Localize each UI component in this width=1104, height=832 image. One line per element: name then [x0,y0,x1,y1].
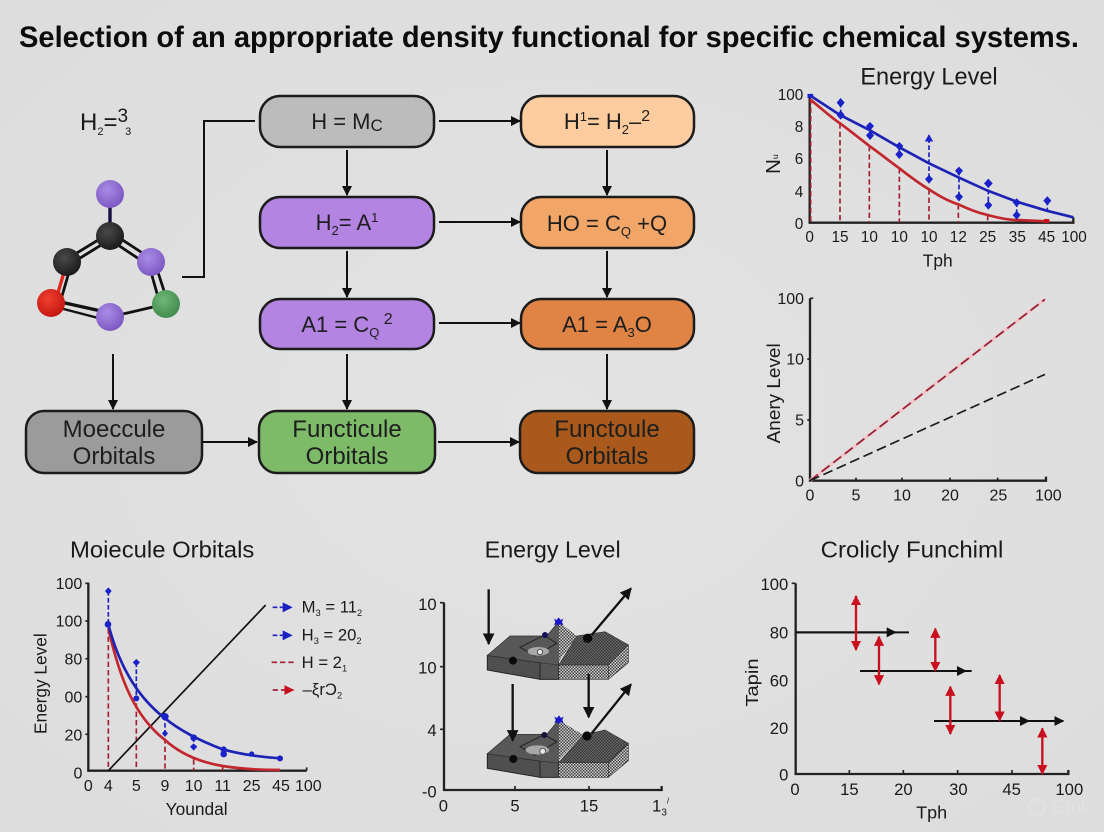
x tick labels: 10 [920,229,938,246]
x tick labels: 10 [861,229,878,246]
y tick labels: 10 [418,658,437,677]
red dashed line [810,299,1045,481]
y tick labels: 20 [770,719,788,738]
box: A1 = A3O: A1 = A [562,312,628,337]
blue markers [105,587,283,761]
y tick labels: 10 [786,352,804,369]
axes [444,603,662,790]
box: A1 = A3O: 3 [628,325,635,340]
chart: molecule orbitals [31,537,362,819]
connector: molecule to flowchart [182,121,255,277]
box: Functicule Orbitals: Orbitals [306,443,388,470]
box: Moeccule Orbitals: Moeccule [63,416,165,443]
y axis label: N [762,159,785,174]
legend: –ξrϽ [303,680,337,699]
red curve [108,628,280,770]
y tick labels: 0 [795,216,803,233]
x tick labels: 3 [661,808,667,819]
chart title: Crolicly Funchiml [821,537,1003,563]
box: A1 = A3O [521,299,694,349]
y tick labels [418,595,437,801]
chart: middle right anery level [763,291,1062,505]
legend: 2 [356,636,362,646]
x tick labels: 45 [272,778,290,795]
red curve [810,99,1047,221]
black diagonal line [108,605,266,771]
x tick labels: 5 [132,778,141,795]
legend: 2 [337,690,342,700]
x tick labels: 5 [510,797,520,816]
box: H1 = H2-2: 2 [622,122,629,137]
x tick labels: 15 [840,780,859,799]
blue curve [108,624,280,758]
x tick labels: 15 [831,229,849,246]
x tick labels [790,780,1083,799]
legend: H = 2 [302,653,342,672]
formula label: = [103,109,117,136]
y tick labels: 100 [778,87,803,104]
chart: top right energy level [762,65,1087,271]
x tick labels: 0 [806,488,815,505]
x tick labels: 20 [894,780,913,799]
arrow: molecule to molecule orbitals [112,354,114,409]
block: lower [487,715,628,777]
box: A1 = Cq2: Q [369,325,379,340]
y tick labels: 0 [795,474,804,491]
red marker [1044,219,1049,223]
x tick labels [84,778,322,795]
box: A1 = A3O: O [635,312,652,337]
box: A1 = Cq2: A1 = C [301,312,369,337]
formula label: 3 [125,126,131,138]
axis ticks [85,583,307,771]
box: H = Mc [260,96,434,147]
box: Functoule Orbitals [520,411,694,473]
x tick labels: 10 [893,488,911,505]
box: H2 = A1: 1 [371,210,378,225]
arrows [489,588,631,741]
icon: molecule [37,180,180,331]
y tick labels [778,87,804,233]
box: H2 = A1 [260,197,434,248]
flow arrows [202,121,607,442]
y tick labels: 0 [73,766,82,783]
box: Functoule Orbitals: Functoule [554,416,660,443]
x axis label: Tph [923,251,953,271]
y tick labels [761,575,788,785]
y tick labels: 10 [418,595,437,614]
y axis label: Energy Level [31,633,51,734]
y axis label: Anery Level [763,343,784,443]
x tick labels: 10 [891,229,908,246]
legend: = 20 [319,626,356,645]
legend: 3 [316,608,321,618]
watermark: Grok [1051,797,1091,817]
x tick labels: 100 [1035,488,1062,505]
axes [810,298,1046,481]
axes [810,95,1073,223]
blue error bars [841,103,1047,215]
chart title: Energy Level [485,537,621,563]
axes [796,583,1068,774]
box: H = Mc: C [371,116,383,135]
formula label: 2 [97,126,103,138]
x tick labels: 0 [84,778,93,795]
box: H1 = H2-2: = H [587,109,622,134]
x tick labels: 25 [979,229,996,246]
box: Functicule Orbitals: Functicule [292,416,402,443]
box: Moeccule Orbitals [26,411,202,473]
x axis label: Tph [916,802,947,822]
black dashed line [810,374,1045,481]
x tick labels: 30 [949,780,968,799]
legend: = 11 [321,598,357,617]
legend: M [302,598,316,617]
blue curve [809,95,1073,217]
y tick labels: 4 [795,184,804,201]
x tick labels: 100 [1055,780,1083,799]
legend: 3 [314,636,319,646]
y tick labels: 80 [770,624,788,643]
black horizontal arrows [796,632,1063,721]
box: H1 = H2-2 [521,96,694,147]
legend: H [302,626,314,645]
x tick labels: 45 [1038,229,1055,246]
y tick labels: 5 [795,413,804,430]
y axis label: u [770,154,780,159]
y tick labels: 0 [779,766,788,785]
x tick labels [806,488,1062,505]
y tick labels: 6 [795,151,803,168]
legend: 2 [357,608,362,618]
title: Selection of an appropriate density functional for specific chemical systems. [19,21,1079,54]
x tick labels: 12 [950,229,967,246]
y tick labels [777,291,804,491]
x tick labels: 5 [852,488,861,505]
y tick labels: 8 [795,119,803,136]
y tick labels: 100 [777,291,804,308]
box: HO = Cq + Q: +Q [631,211,667,236]
y tick labels: 80 [65,651,82,668]
x tick labels: 20 [941,488,959,505]
red dashed drop lines [108,628,280,771]
y tick labels: 20 [65,727,82,744]
x tick labels: 15 [580,797,598,816]
x tick labels [805,229,1087,246]
box: H2 = A1: 2 [332,223,339,238]
watermark [1029,797,1091,817]
x tick labels: 35 [1009,229,1026,246]
box: HO = Cq + Q: HO = C [547,211,621,236]
y tick labels: 100 [56,576,82,593]
x tick labels: 100 [1061,229,1087,246]
x axis label: Youndal [166,799,228,819]
blue markers [808,94,1051,219]
box: H1 = H2-2: 1 [580,109,587,124]
box: H1 = H2-2: H [564,109,580,134]
x tick labels: 1 [652,797,661,816]
x tick labels: / [667,796,670,806]
x tick labels: 4 [104,778,113,795]
y tick labels: 100 [761,575,788,594]
y tick labels: 100 [56,614,82,631]
blue error bars [108,591,224,754]
box: A1 = Cq2: 2 [379,311,393,328]
block: upper [487,617,628,679]
red dashed drop lines [811,99,988,223]
chart title: Moiecule Orbitals [70,537,254,563]
box: H = Mc: H = M [311,109,371,134]
y tick labels: 60 [770,672,788,691]
x tick labels: 0 [790,780,800,799]
tick marks [807,298,998,481]
x tick labels: 10 [185,778,203,795]
x tick labels [439,796,670,819]
box: H2 = A1: H [316,210,332,235]
box: Functicule Orbitals [259,411,435,473]
x tick labels: 0 [439,797,448,816]
y tick labels [56,576,82,783]
axes [88,583,307,771]
box: H1 = H2-2: – [629,109,642,134]
x tick labels: 0 [805,229,814,246]
legend: 1 [342,663,347,673]
x tick labels: 9 [161,778,170,795]
formula label: H [80,109,97,136]
y tick labels: 00 [65,690,82,707]
box: H1 = H2-2: 2 [641,108,650,125]
box: Moeccule Orbitals: Orbitals [73,443,155,470]
red double arrows [856,596,1042,774]
x tick labels: 100 [295,778,322,795]
legend [272,598,362,700]
y tick labels: 4 [427,721,437,740]
x tick labels: 11 [214,778,231,795]
x tick labels: 45 [1002,780,1021,799]
x tick labels: 25 [989,488,1007,505]
y tick labels: -0 [422,782,437,801]
chart: energy level blocks [418,537,670,819]
box: Functoule Orbitals: Orbitals [566,443,648,470]
box: HO = Cq + Q: Q [621,224,631,239]
box: A1 = Cq2 [260,299,434,349]
chart: crolicly funchiml [742,537,1083,822]
chart title: Energy Level [860,65,998,91]
box: H2 = A1: = A [339,210,371,235]
x tick labels: 25 [243,778,261,795]
box: HO = Cq + Q [521,197,694,248]
y axis label: Tapin [742,658,762,707]
formula label: 3 [117,106,128,127]
